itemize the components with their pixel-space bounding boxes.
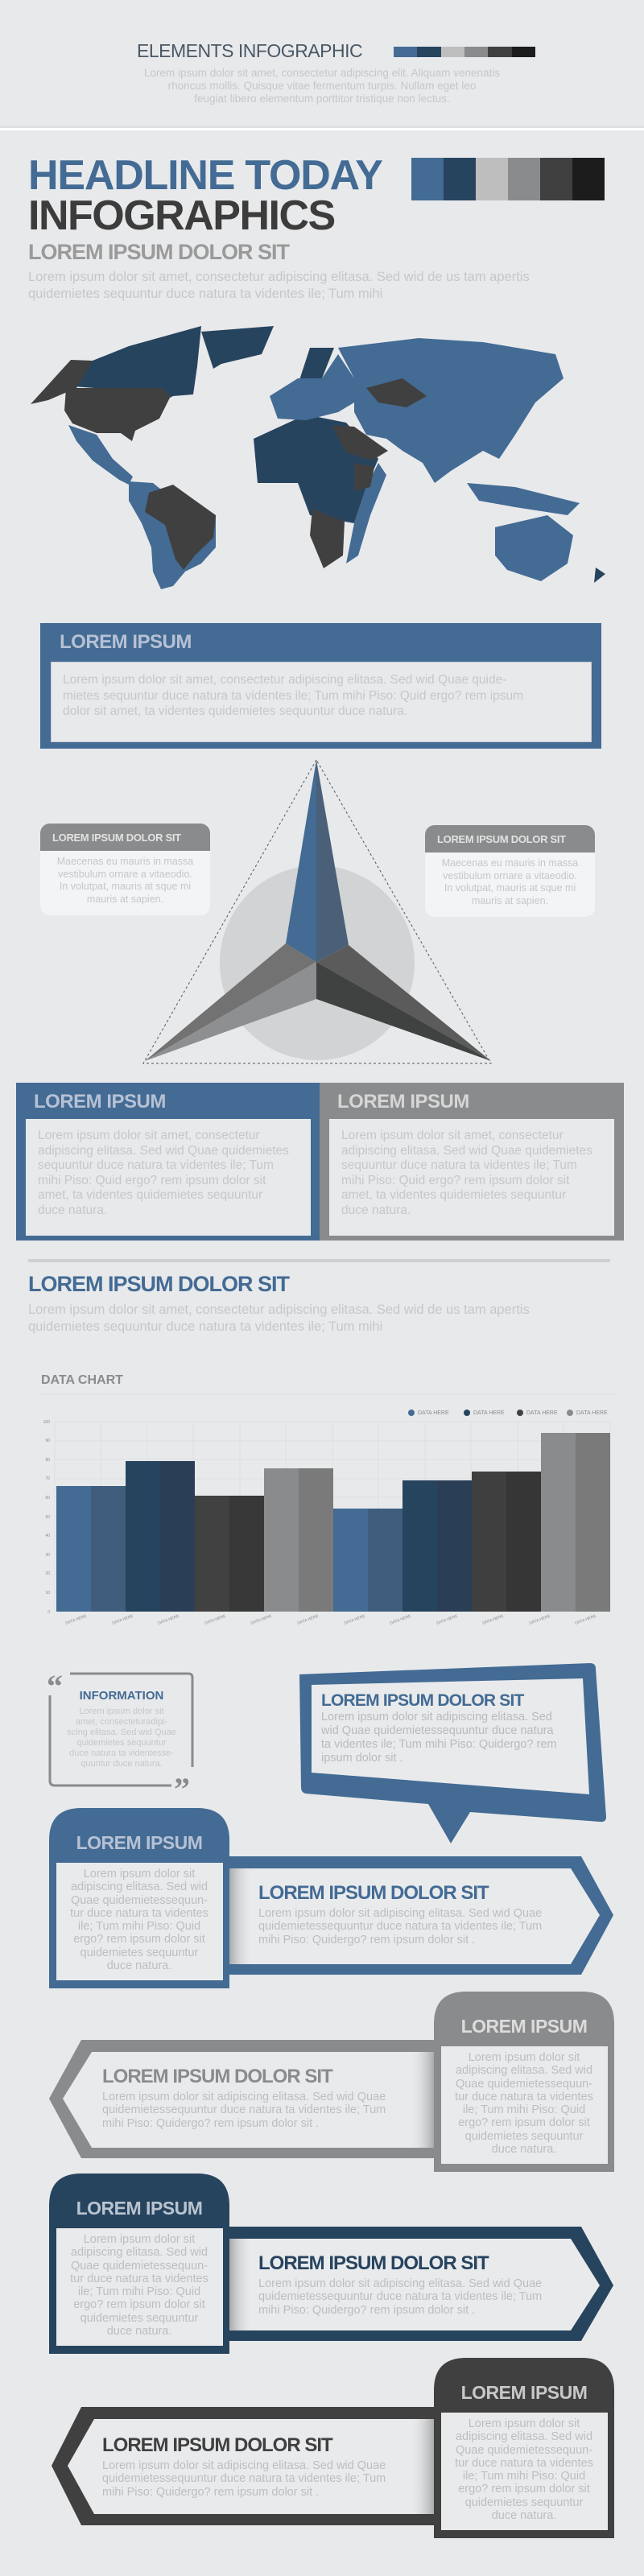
tab text: quidemietes sequuntur	[465, 2130, 583, 2143]
intro text: Lorem ipsum dolor sit amet, consectetur adipiscing elit. Aliquam venenatis	[144, 67, 500, 79]
banner text: mihi Piso: Quidergo? rem ipsum dolor sit .	[102, 2486, 319, 2499]
panel: lorem ipsum blue box	[40, 623, 601, 749]
banner text: quidemietessequuntur duce natura ta videntes ile; Tum	[102, 2472, 386, 2485]
bubble text: ta videntes ile; Tum mihi Piso: Quidergo? rem	[321, 1738, 557, 1751]
callout: right label box	[425, 825, 595, 917]
text: Lorem ipsum dolor sit amet, consectetur adipiscing elitasa. Sed wid de us tam apertis	[28, 1302, 530, 1317]
heading: LOREM IPSUM	[337, 1091, 469, 1113]
bubble heading: LOREM IPSUM DOLOR SIT	[321, 1691, 524, 1710]
tab text: Quae quidemietessequun-	[456, 2444, 592, 2457]
banner text	[258, 2277, 542, 2317]
tab text: duce natura.	[107, 2325, 171, 2338]
bar chart: 50	[45, 1515, 50, 1520]
panel: gray lorem ipsum	[320, 1083, 624, 1241]
bar chart: DATA HERE	[65, 1614, 88, 1626]
info heading: INFORMATION	[80, 1689, 163, 1703]
intro paragraph: quidemietes sequuntur duce natura ta videntes ile; Tum mihi	[28, 287, 382, 301]
headline block	[28, 152, 605, 301]
tab text: Quae quidemietessequun-	[71, 2260, 208, 2273]
panel body	[51, 662, 592, 742]
bar chart: DATA HERE	[436, 1614, 459, 1626]
panel: gray lorem ipsum: mihi Piso: Quid ergo? rem ipsum dolor sit	[341, 1174, 569, 1187]
information quote box	[47, 1668, 193, 1791]
information quote box: “	[47, 1668, 63, 1704]
bar chart: DATA HERE	[158, 1614, 180, 1626]
panel: blue lorem ipsum: amet, ta videntes quidemietes sequuntur	[38, 1188, 262, 1202]
tab text: quidemietes sequuntur	[465, 2496, 583, 2509]
banner heading: LOREM IPSUM DOLOR SIT	[102, 2066, 332, 2087]
tab text: adipiscing elitasa. Sed wid	[456, 2064, 592, 2077]
banner text	[102, 2091, 386, 2130]
world map	[31, 326, 605, 589]
panel: gray lorem ipsum: Lorem ipsum dolor sit amet, consectetur	[341, 1129, 564, 1142]
bar chart: DATA HERE	[297, 1614, 320, 1626]
bar chart: 60	[45, 1496, 50, 1501]
panel: blue lorem ipsum: adipiscing elitasa. Sed wid Quae quidemietes	[38, 1143, 289, 1158]
panel: gray lorem ipsum: duce natura.	[341, 1203, 411, 1217]
tab block 1: blue	[49, 1808, 613, 1988]
bar chart: DATA HERE	[250, 1614, 273, 1626]
panel body: Lorem ipsum dolor sit amet, consectetur adipiscing elitasa. Sed wid Quae quide-	[63, 673, 506, 687]
panel: blue lorem ipsum: Lorem ipsum dolor sit amet, consectetur	[38, 1129, 260, 1142]
tab text: Lorem ipsum dolor sit	[84, 1868, 195, 1880]
callout: left label box: mauris at sapien.	[87, 894, 163, 905]
tab text: Quae quidemietessequun-	[71, 1894, 208, 1907]
info text	[67, 1707, 176, 1769]
tab block 2: gray	[49, 1992, 614, 2172]
panel body: dolor sit amet, ta videntes quidemietes sequuntur duce natura.	[63, 704, 407, 718]
banner text	[258, 1907, 542, 1946]
tab text: ile; Tum mihi Piso: Quid	[78, 1920, 200, 1933]
panel: blue lorem ipsum: mihi Piso: Quid ergo? rem ipsum dolor sit	[38, 1174, 266, 1187]
callout heading: LOREM IPSUM DOLOR SIT	[52, 832, 181, 844]
bar chart: DATA HERE	[482, 1614, 505, 1626]
bar chart: DATA HERE	[473, 1410, 505, 1416]
bar chart: DATA HERE	[390, 1614, 412, 1626]
bubble text: ipsum dolor sit .	[321, 1752, 403, 1765]
callout: right label box: vestibulum ornare a vitaeodio.	[443, 869, 577, 881]
callout: left label box: vestibulum ornare a vitaeodio.	[58, 868, 192, 879]
banner text: mihi Piso: Quidergo? rem ipsum dolor sit .	[258, 2304, 475, 2317]
bar chart: 100	[43, 1420, 50, 1425]
headline line 2: INFOGRAPHICS	[28, 192, 335, 239]
speech bubble callout	[299, 1663, 606, 1843]
title small: ELEMENTS INFOGRAPHIC	[137, 40, 362, 61]
tab text: ergo? rem ipsum dolor sit	[458, 2483, 590, 2496]
panel: gray lorem ipsum: amet, ta videntes quidemietes sequuntur	[341, 1188, 566, 1202]
info text: Lorem ipsum dolor sit	[79, 1707, 164, 1716]
callout heading	[425, 825, 595, 852]
panel: gray lorem ipsum: sequuntur duce natura ta videntes ile; Tum	[341, 1158, 577, 1172]
section heading: chart	[28, 1272, 530, 1334]
intro text: rhoncus mollis. Quisque vitae fermentum turpis. Nullam eget leo	[168, 80, 476, 92]
callout heading: LOREM IPSUM DOLOR SIT	[437, 833, 566, 845]
panel: blue lorem ipsum: sequuntur duce natura ta videntes ile; Tum	[38, 1158, 274, 1172]
tab text: ile; Tum mihi Piso: Quid	[463, 2470, 585, 2483]
tab text: duce natura.	[492, 2509, 556, 2522]
tab text: tur duce natura ta videntes	[70, 1907, 208, 1920]
bar chart: 80	[45, 1458, 50, 1463]
header: elements infographic	[137, 40, 535, 105]
bar chart: 0	[47, 1610, 50, 1615]
heading: LOREM IPSUM	[34, 1091, 166, 1113]
bar chart: DATA CHART	[41, 1373, 123, 1387]
bubble text: Lorem ipsum dolor sit adipiscing elitasa. Sed	[321, 1711, 552, 1724]
intro paragraph	[28, 270, 530, 301]
banner heading: LOREM IPSUM DOLOR SIT	[102, 2434, 332, 2456]
banner text: quidemietessequuntur duce natura ta videntes ile; Tum	[258, 2290, 542, 2303]
callout: left label box	[40, 824, 210, 915]
info text: duce natura ta videntesse-	[69, 1748, 174, 1758]
tab text: tur duce natura ta videntes	[455, 2457, 593, 2470]
banner heading: LOREM IPSUM DOLOR SIT	[258, 1882, 489, 1904]
bar chart: DATA HERE	[112, 1614, 134, 1626]
tab text: adipiscing elitasa. Sed wid	[71, 1880, 208, 1893]
banner text: mihi Piso: Quidergo? rem ipsum dolor sit .	[258, 1934, 475, 1946]
tab block 4: dark	[52, 2358, 614, 2538]
text	[28, 1302, 530, 1334]
tab text: Lorem ipsum dolor sit	[84, 2233, 195, 2246]
tab text: tur duce natura ta videntes	[455, 2091, 593, 2103]
tab text: Lorem ipsum dolor sit	[469, 2051, 580, 2064]
bar chart: 30	[45, 1553, 50, 1558]
swatch bar small	[394, 47, 535, 57]
tab heading: LOREM IPSUM	[76, 2198, 202, 2219]
bar chart	[39, 1373, 616, 1626]
tab heading: LOREM IPSUM	[461, 2382, 587, 2403]
tab text: adipiscing elitasa. Sed wid	[71, 2246, 208, 2259]
tab text: ile; Tum mihi Piso: Quid	[463, 2103, 585, 2116]
pyramid diagram	[142, 760, 492, 1064]
bar chart: DATA HERE	[575, 1614, 597, 1626]
text: quidemietes sequuntur duce natura ta videntes ile; Tum mihi	[28, 1319, 382, 1334]
tab text: duce natura.	[492, 2143, 556, 2156]
panel body: mietes sequuntur duce natura ta videntes ile; Tum mihi Piso: Quid ergo? rem ipsum	[63, 689, 523, 702]
banner text: Lorem ipsum dolor sit adipiscing elitasa. Sed wid Quae	[258, 2277, 542, 2290]
tab text: ergo? rem ipsum dolor sit	[73, 2298, 205, 2311]
bar chart: DATA HERE	[344, 1614, 366, 1626]
banner text: quidemietessequuntur duce natura ta videntes ile; Tum	[258, 1920, 542, 1933]
tab text: Quae quidemietessequun-	[456, 2078, 592, 2091]
bar chart: 10	[45, 1591, 50, 1596]
bar chart: DATA HERE	[576, 1410, 608, 1416]
tab heading: LOREM IPSUM	[76, 1832, 202, 1853]
panel: blue lorem ipsum: duce natura.	[38, 1203, 107, 1217]
bar chart: DATA HERE	[418, 1410, 449, 1416]
bar chart: DATA HERE	[529, 1614, 551, 1626]
tab text	[70, 1868, 208, 1972]
tab text	[455, 2417, 593, 2522]
tab text	[455, 2051, 593, 2156]
tab text: ergo? rem ipsum dolor sit	[458, 2116, 590, 2129]
bar chart: DATA HERE	[204, 1614, 227, 1626]
callout: right label box: In volutpat, mauris at sque mi	[444, 882, 576, 894]
intro paragraph: Lorem ipsum dolor sit amet, consectetur adipiscing elitasa. Sed wid de us tam apertis	[28, 270, 530, 284]
callout: left label box: In volutpat, mauris at sque mi	[60, 881, 191, 892]
callout heading	[40, 824, 210, 851]
info text: scing elitasa. Sed wid Quae	[67, 1728, 176, 1737]
callout: left label box: Maecenas eu mauris in massa	[57, 856, 193, 867]
intro text	[144, 67, 500, 105]
banner text: Lorem ipsum dolor sit adipiscing elitasa. Sed wid Quae	[102, 2091, 386, 2103]
heading: LOREM IPSUM DOLOR SIT	[28, 1272, 289, 1296]
headline: HEADLINE TODAY	[28, 152, 382, 199]
swatch bar large	[411, 158, 605, 200]
tab block 3: navy	[49, 2174, 613, 2354]
info text: quidemietes sequuntur	[76, 1738, 167, 1748]
banner text: Lorem ipsum dolor sit adipiscing elitasa. Sed wid Quae	[258, 1907, 542, 1920]
tab text: adipiscing elitasa. Sed wid	[456, 2430, 592, 2443]
subtitle: LOREM IPSUM DOLOR SIT	[28, 240, 289, 264]
bar chart: 40	[45, 1534, 50, 1538]
callout: right label box: Maecenas eu mauris in massa	[442, 857, 578, 869]
tab text: ergo? rem ipsum dolor sit	[73, 1933, 205, 1946]
bar chart: DATA HERE	[526, 1410, 558, 1416]
tab text: tur duce natura ta videntes	[70, 2273, 208, 2285]
info text: quuntur duce natura.	[80, 1759, 163, 1769]
banner text	[102, 2459, 386, 2499]
tab text: Lorem ipsum dolor sit	[469, 2417, 580, 2430]
banner text: Lorem ipsum dolor sit adipiscing elitasa. Sed wid Quae	[102, 2459, 386, 2472]
tab text: duce natura.	[107, 1959, 171, 1972]
banner heading: LOREM IPSUM DOLOR SIT	[258, 2252, 489, 2274]
banner text: quidemietessequuntur duce natura ta videntes ile; Tum	[102, 2103, 386, 2116]
panel: blue lorem ipsum	[16, 1083, 320, 1241]
tab text: quidemietes sequuntur	[80, 1946, 198, 1959]
bar chart: 70	[45, 1476, 50, 1481]
bar chart: 20	[45, 1571, 50, 1576]
info text: amet, consecteturadipi-	[76, 1717, 167, 1727]
tab text: ile; Tum mihi Piso: Quid	[78, 2285, 200, 2298]
banner text: mihi Piso: Quidergo? rem ipsum dolor sit .	[102, 2117, 319, 2130]
tab heading: LOREM IPSUM	[461, 2016, 587, 2037]
callout: right label box: mauris at sapien.	[472, 895, 548, 906]
bar chart: 90	[45, 1439, 50, 1443]
tab text: quidemietes sequuntur	[80, 2312, 198, 2325]
tab text	[70, 2233, 208, 2338]
intro text: feugiat libero elementum porttitor tristique non lectus.	[194, 93, 450, 105]
panel: gray lorem ipsum: adipiscing elitasa. Sed wid Quae quidemietes	[341, 1143, 592, 1158]
bubble text: wid Quae quidemietessequuntur duce natura	[321, 1724, 554, 1737]
bubble text	[321, 1711, 557, 1765]
panel heading: LOREM IPSUM	[60, 631, 192, 653]
